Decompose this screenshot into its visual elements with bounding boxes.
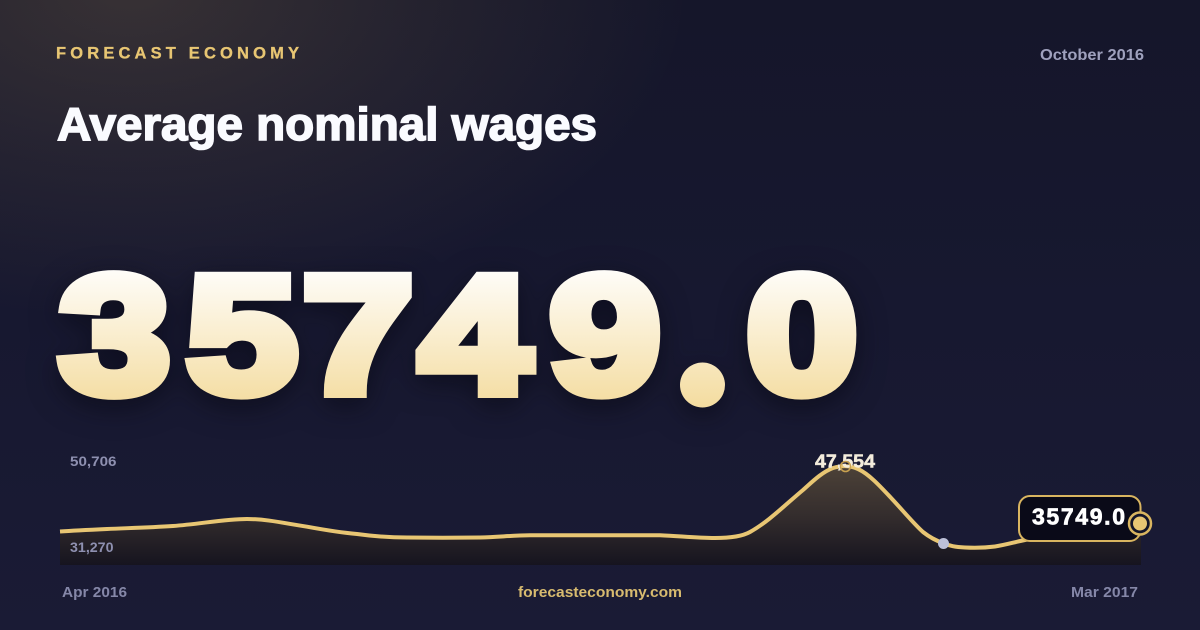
title: Average nominal wages [57,98,597,150]
decimal point: . [679,248,726,433]
callout value: 35749.0 [1032,504,1125,530]
headline value [59,242,857,433]
chart area fill [60,466,1141,565]
chart line [60,466,1141,548]
current value callout [1019,496,1140,541]
axis maximum label: 50,706 [70,453,117,469]
decimal point round dot [680,362,725,408]
digits before the decimal point: 35749 [59,242,660,427]
end date label: Mar 2017 [1071,584,1138,601]
axis minimum label: 31,270 [70,539,114,555]
current point marker [1129,512,1151,534]
peak value label: 47,554 [815,452,875,472]
area chart [60,466,1141,565]
low point marker [938,538,949,549]
date label: October 2016 [1040,47,1144,64]
peak marker [840,462,850,472]
decimal digit: 0 [747,242,857,427]
source website: forecasteconomy.com [518,584,682,601]
start date label: Apr 2016 [62,584,127,601]
brand label: FORECAST ECONOMY [56,44,299,62]
